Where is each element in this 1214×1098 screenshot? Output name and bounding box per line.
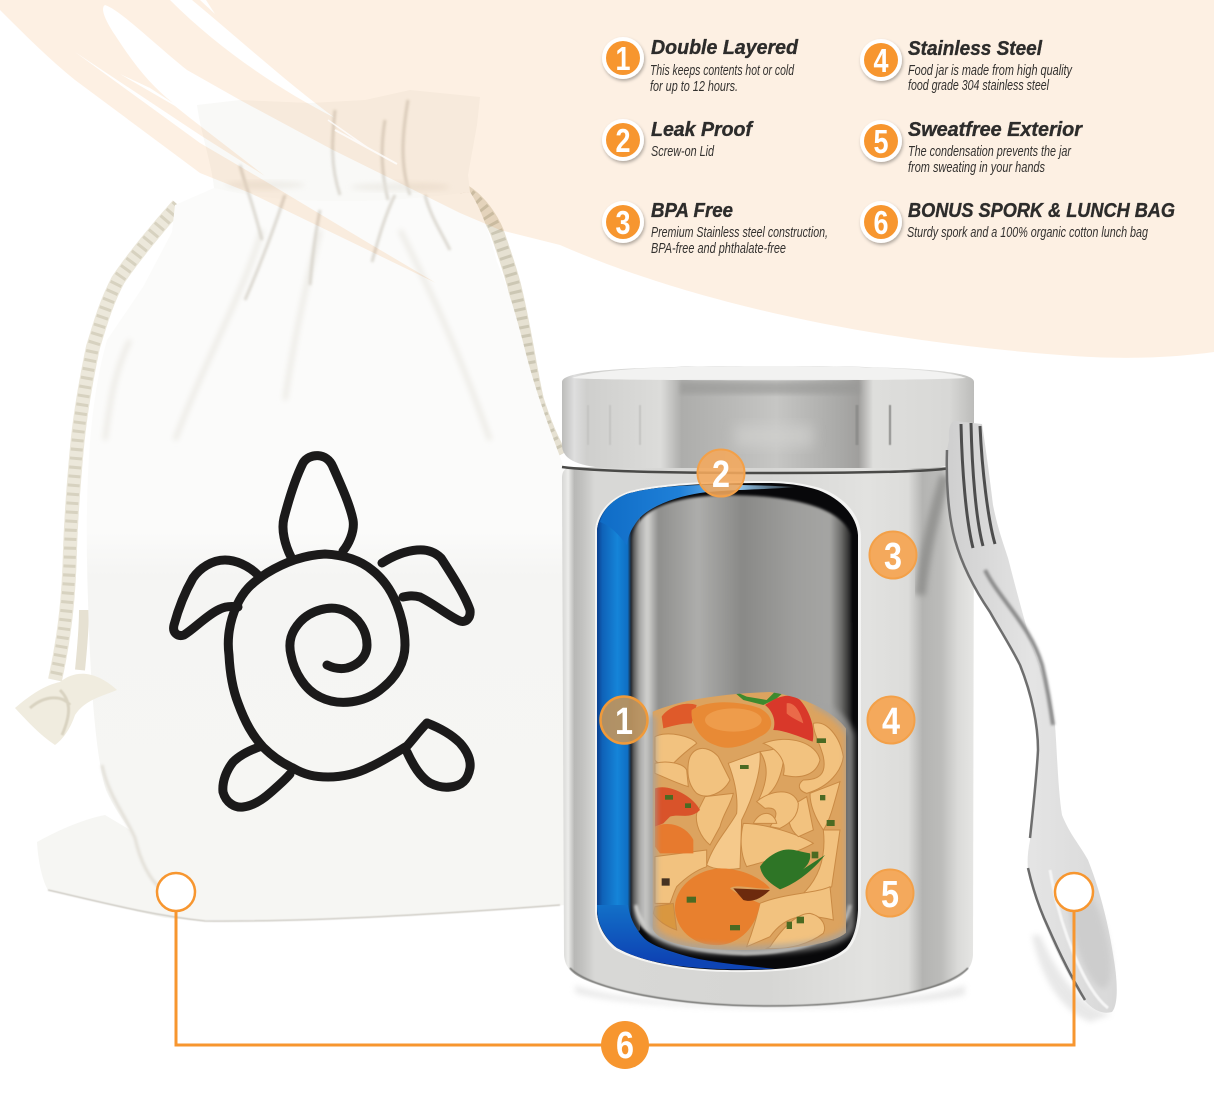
jar badge 1: 1 bbox=[615, 701, 633, 743]
blue wall bottom band bbox=[597, 905, 775, 969]
feature 1: double layered: Double Layered bbox=[651, 37, 799, 59]
food: pasta and shrimp bbox=[653, 688, 846, 953]
tomato highlight bbox=[787, 703, 803, 723]
lid brushed light patch bbox=[735, 425, 813, 447]
left shrimp upper bbox=[655, 787, 700, 827]
jar badge 4 bbox=[868, 696, 914, 744]
spork bowl crease bbox=[1050, 870, 1108, 1008]
turtle front right flipper bbox=[382, 550, 470, 621]
feature 4: stainless steel: food grade 304 stainless steel bbox=[908, 78, 1050, 94]
bag rope knot bbox=[15, 674, 117, 745]
feature 4: stainless steel: Food jar is made from high quality bbox=[908, 63, 1073, 79]
feature 1: double layered: 1 bbox=[616, 40, 630, 77]
jar badge 3 bbox=[870, 532, 916, 578]
feature 3: bpa free: 3 bbox=[616, 204, 630, 241]
brush streaks over bag neck bbox=[328, 120, 397, 164]
feature 2: leak proof: 2 bbox=[616, 122, 630, 159]
bag rope right bbox=[462, 190, 560, 455]
jar body bbox=[562, 467, 974, 1006]
jar ground shadow bbox=[575, 985, 965, 1008]
feature 1: double layered: for up to 12 hours. bbox=[650, 79, 738, 95]
turtle front left flipper bbox=[174, 560, 258, 636]
feature 5: sweatfree exterior: 5 bbox=[874, 123, 888, 160]
feature 1: double layered bbox=[602, 37, 799, 95]
jar bottom edge bbox=[570, 968, 968, 1006]
pasta dark base bbox=[653, 690, 846, 953]
bag ground shadow bbox=[48, 890, 560, 921]
bag flap crease bbox=[102, 765, 162, 890]
jar badge 2 bbox=[698, 450, 744, 496]
jar badge 2: 2 bbox=[712, 454, 730, 496]
pasta ribbons bbox=[653, 723, 843, 949]
blue wall top band bbox=[600, 485, 795, 545]
cutaway white edge bbox=[595, 481, 861, 972]
tomato bbox=[765, 696, 813, 742]
lid brushed dark band bbox=[680, 382, 860, 394]
jar lid bbox=[562, 366, 974, 468]
feature 4: stainless steel bbox=[860, 38, 1073, 94]
spork bowl rim bbox=[1028, 868, 1085, 1000]
spork bowl shadow bbox=[1032, 935, 1112, 1022]
shrimp top bbox=[691, 702, 771, 748]
jar badge 1 bbox=[600, 696, 648, 744]
inner steel container bbox=[632, 495, 852, 955]
badge 6 on connector: 6 bbox=[616, 1025, 634, 1067]
feature 3: bpa free: Premium Stainless steel construction, bbox=[651, 225, 828, 241]
turtle head bbox=[283, 456, 353, 557]
spork tine slits bbox=[961, 423, 995, 548]
feature 6: bonus spork and lunch bag: BONUS SPORK & LUNCH BAG bbox=[908, 200, 1175, 222]
feature 2: leak proof: Leak Proof bbox=[651, 119, 754, 141]
bag rope left bbox=[55, 205, 178, 680]
inner container rim bbox=[636, 905, 850, 953]
jar lid grip marks bbox=[588, 405, 890, 445]
parsley bbox=[760, 850, 825, 889]
shrimp tail top bbox=[662, 704, 697, 728]
bottom shrimp bbox=[675, 868, 770, 945]
badge 6 on connector bbox=[601, 1021, 649, 1069]
spork left dark edge bbox=[947, 450, 1038, 838]
left shrimp lower bbox=[655, 824, 693, 853]
spork body bbox=[947, 421, 1117, 1013]
feature 2: leak proof bbox=[602, 119, 754, 161]
bag rope second strand bbox=[80, 610, 84, 670]
jar badge 3: 3 bbox=[884, 536, 902, 578]
illustration: stainless jar bbox=[562, 366, 974, 1008]
spork neck reflection bbox=[985, 570, 1053, 725]
feature 5: sweatfree exterior: The condensation prevents the jar bbox=[908, 144, 1072, 160]
blue insulation wall bbox=[597, 493, 640, 948]
feature 3: bpa free bbox=[602, 200, 828, 257]
bag knot shading bbox=[30, 690, 70, 735]
jar badge 5: 5 bbox=[881, 874, 899, 916]
shrimp top highlight bbox=[705, 708, 762, 732]
turtle back right flipper bbox=[407, 723, 470, 787]
spork bowl tone bbox=[1060, 878, 1120, 992]
feature 4: stainless steel: 4 bbox=[874, 42, 889, 79]
feature 6: bonus spork and lunch bag bbox=[860, 200, 1175, 243]
bottom shrimp shadow bbox=[733, 888, 770, 901]
connector line for callout 6 bbox=[176, 911, 1074, 1045]
turtle back left flipper bbox=[223, 746, 290, 807]
turtle shell spiral and body bbox=[228, 554, 427, 777]
bag neck soft shadows bbox=[225, 181, 450, 191]
feature 5: sweatfree exterior bbox=[860, 119, 1083, 176]
bag neck pleats bbox=[240, 100, 450, 300]
feature 3: bpa free: BPA Free bbox=[651, 200, 733, 222]
bag cloth folds bbox=[105, 230, 490, 440]
jar lid highlight bbox=[572, 366, 966, 380]
feature 6: bonus spork and lunch bag: 6 bbox=[874, 204, 888, 241]
marker ring: bag bbox=[157, 873, 195, 911]
feature 3: bpa free: BPA-free and phthalate-free bbox=[651, 241, 786, 257]
marker ring: spork bbox=[1055, 873, 1093, 911]
cutaway dark cavity bbox=[597, 483, 858, 970]
jar badge 4: 4 bbox=[882, 701, 900, 743]
feature 5: sweatfree exterior: from sweating in your hands bbox=[908, 160, 1045, 176]
food edge fade bbox=[652, 703, 850, 950]
feature 1: double layered: This keeps contents hot or cold bbox=[650, 63, 795, 79]
illustration: drawstring lunch bag bbox=[15, 90, 565, 921]
illustration: spork bbox=[920, 421, 1120, 1022]
bag ruffled neck bbox=[197, 90, 480, 201]
spork shadow on jar bbox=[920, 476, 945, 595]
jar lid groove bbox=[562, 467, 950, 473]
basil bbox=[736, 692, 782, 705]
jar badge 5 bbox=[866, 870, 914, 916]
feature 4: stainless steel: Stainless Steel bbox=[908, 38, 1042, 60]
herb flecks bbox=[662, 738, 835, 930]
bag turtle logo bbox=[174, 456, 470, 807]
background: cream swoosh with brush streaks bbox=[0, 0, 1214, 358]
feature 5: sweatfree exterior: Sweatfree Exterior bbox=[908, 119, 1083, 141]
bag body bbox=[37, 188, 565, 921]
feature 2: leak proof: Screw-on Lid bbox=[651, 144, 715, 160]
